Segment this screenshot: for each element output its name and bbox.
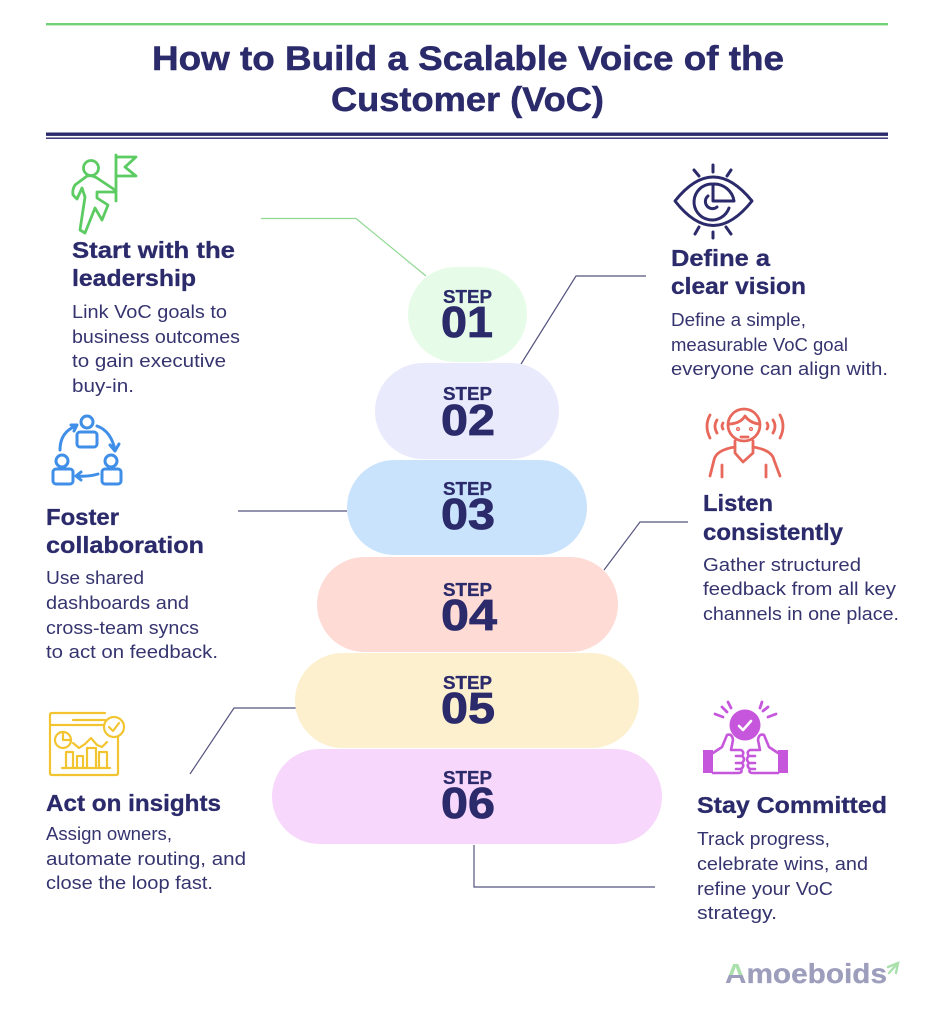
heading and text: foster collaboration: dashboards and bbox=[46, 593, 189, 613]
heading and text: listen consistently: channels in one place. bbox=[703, 604, 899, 624]
heading and text: start with the leadership: to gain executive bbox=[72, 351, 226, 371]
heading and text: define a clear vision: measurable VoC goal bbox=[671, 335, 848, 355]
heading and text: foster collaboration: to act on feedback. bbox=[46, 642, 218, 662]
connector: step 3 bbox=[238, 510, 347, 512]
icon: thumbs up with check badge bbox=[703, 702, 788, 773]
title bbox=[152, 40, 784, 119]
connector: step 5 bbox=[190, 708, 296, 774]
heading and text: listen consistently: Listen bbox=[703, 490, 773, 516]
pill: step 3: STEP bbox=[443, 479, 492, 499]
heading and text: act on insights: Assign owners, bbox=[46, 824, 172, 844]
heading and text: define a clear vision: Define a bbox=[671, 245, 771, 271]
icon: eye with chart bbox=[675, 165, 752, 238]
heading and text: stay committed: Track progress, bbox=[697, 829, 830, 849]
icon: person with flag bbox=[73, 155, 136, 233]
pill: step 2 bbox=[375, 363, 559, 459]
heading and text: act on insights: close the loop fast. bbox=[46, 873, 213, 893]
title double rule bbox=[46, 132, 888, 139]
pill: step 4: 04 bbox=[441, 591, 498, 640]
heading and text: define a clear vision: clear vision bbox=[671, 273, 806, 299]
heading and text: act on insights: Act on insights bbox=[46, 790, 221, 816]
heading and text: listen consistently bbox=[703, 490, 899, 624]
pill: step 1 bbox=[408, 267, 527, 362]
heading and text: foster collaboration bbox=[46, 504, 218, 662]
connector: step 1 bbox=[261, 218, 426, 276]
heading and text: start with the leadership: buy-in. bbox=[72, 376, 134, 396]
heading and text: listen consistently: Gather structured bbox=[703, 555, 861, 575]
heading and text: listen consistently: consistently bbox=[703, 519, 843, 545]
heading and text: foster collaboration: Use shared bbox=[46, 568, 144, 588]
pill: step 3 bbox=[347, 460, 587, 555]
connector: step 6 bbox=[474, 845, 655, 887]
heading and text: stay committed: Stay Committed bbox=[697, 792, 887, 818]
heading and text: foster collaboration: Foster bbox=[46, 504, 119, 530]
top rule bbox=[46, 23, 888, 25]
heading and text: foster collaboration: collaboration bbox=[46, 532, 204, 558]
heading and text: define a clear vision: everyone can align with. bbox=[671, 359, 888, 379]
pill: step 6: 06 bbox=[441, 779, 495, 828]
pill: step 4: STEP bbox=[443, 580, 492, 600]
connector: step 2 bbox=[521, 276, 646, 364]
heading and text: define a clear vision: Define a simple, bbox=[671, 310, 806, 330]
heading and text: act on insights: automate routing, and bbox=[46, 849, 246, 869]
heading and text: define a clear vision bbox=[671, 245, 888, 379]
icon: collaboration cycle bbox=[53, 416, 121, 484]
title: How to Build a Scalable Voice of the bbox=[152, 40, 784, 78]
heading and text: start with the leadership: Start with the bbox=[72, 237, 235, 263]
heading and text: stay committed: celebrate wins, and bbox=[697, 854, 868, 874]
heading and text: stay committed: refine your VoC bbox=[697, 879, 833, 899]
pill: step 2: STEP bbox=[443, 384, 492, 404]
heading and text: stay committed bbox=[697, 792, 887, 923]
icon: listening person bbox=[707, 409, 783, 477]
pill: step 1: 01 bbox=[441, 298, 493, 347]
heading and text: start with the leadership bbox=[72, 237, 240, 396]
logo: Amoeboids: Amoeboids bbox=[725, 958, 887, 989]
pill: step 4 bbox=[317, 557, 618, 652]
heading and text: listen consistently: feedback from all key bbox=[703, 579, 896, 599]
pill: step 5: STEP bbox=[443, 673, 492, 693]
heading and text: start with the leadership: leadership bbox=[72, 265, 196, 291]
pill: step 3: 03 bbox=[441, 490, 495, 539]
pill: step 5: 05 bbox=[441, 684, 495, 733]
icon: analytics dashboard bbox=[50, 713, 124, 775]
heading and text: foster collaboration: cross-team syncs bbox=[46, 618, 199, 638]
heading and text: act on insights bbox=[46, 790, 246, 893]
heading and text: stay committed: strategy. bbox=[697, 903, 777, 923]
heading and text: start with the leadership: business outcomes bbox=[72, 327, 240, 347]
title: Customer (VoC) bbox=[331, 81, 604, 119]
pill: step 5 bbox=[295, 653, 639, 748]
connector: step 4 bbox=[604, 522, 688, 570]
pill: step 2: 02 bbox=[441, 396, 495, 445]
pill: step 6: STEP bbox=[443, 768, 492, 788]
pill: step 1: STEP bbox=[443, 287, 492, 307]
pill: step 6 bbox=[272, 749, 662, 844]
heading and text: start with the leadership: Link VoC goals to bbox=[72, 302, 227, 322]
